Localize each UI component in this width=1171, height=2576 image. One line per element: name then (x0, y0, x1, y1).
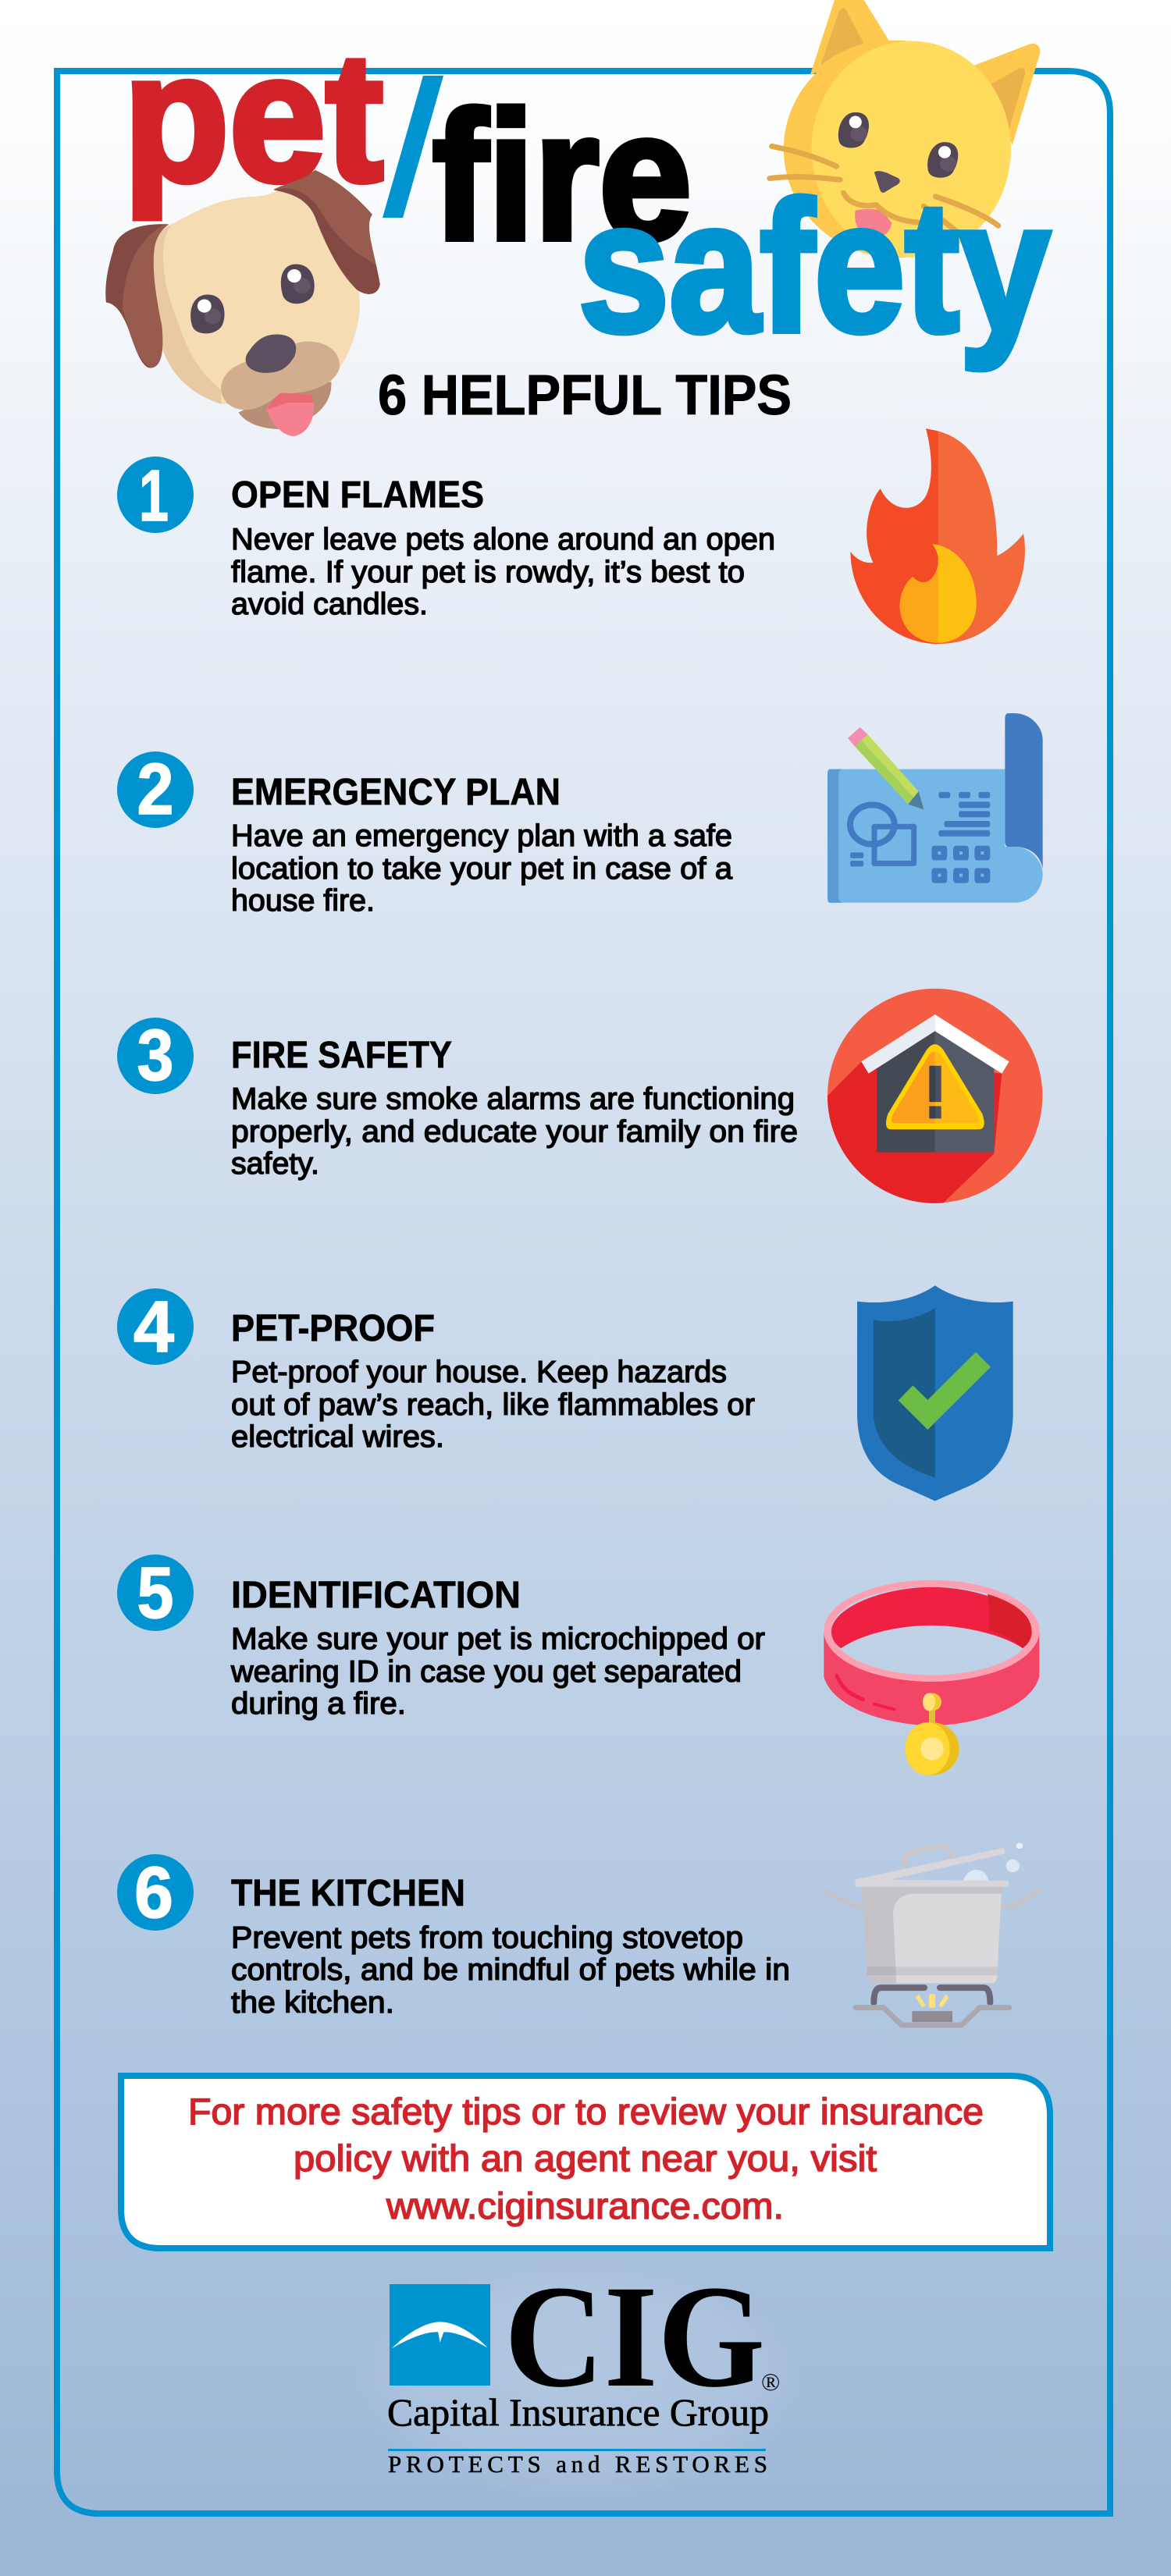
text: tip 3 body (231, 1082, 798, 1181)
text: tip 2 body (231, 819, 732, 918)
icon: cat (770, 0, 1040, 258)
tip 2 (117, 748, 732, 918)
heading: fire safety: FIRE SAFETY (231, 1035, 452, 1076)
title: fire safety (432, 73, 1050, 371)
icon: house fire alarm (828, 989, 1042, 1203)
logo: CIG Capital Insurance Group: ® (761, 2368, 780, 2396)
tip 6 (117, 1852, 790, 2020)
text: tip 2 body: Have an emergency plan with a safe (231, 819, 732, 853)
tip 5 (117, 1552, 765, 1721)
text: tip 4 body: out of paw’s reach, like flammables or (231, 1388, 755, 1422)
text: tip 5 body (230, 1622, 765, 1721)
heading: emergency plan: EMERGENCY PLAN (231, 772, 561, 813)
title: fire safety: safety (578, 164, 1050, 371)
icon: pet collar (824, 1580, 1039, 1775)
text: tip 2 body: location to take your pet in case of a (231, 852, 732, 886)
number badge 5 (117, 1552, 194, 1633)
callout: more safety tips (121, 2076, 1050, 2248)
number badge 4 (117, 1286, 194, 1367)
number badge 3: 3 (137, 1014, 173, 1096)
text: tip 1 body: Never leave pets alone around an open (231, 523, 775, 556)
text: tip 1 body: flame. If your pet is rowdy, it’s best to (231, 556, 745, 589)
heading: identification: IDENTIFICATION (231, 1575, 521, 1616)
text: tip 3 body: safety. (231, 1147, 319, 1181)
text: tip 5 body: Make sure your pet is microchipped or (231, 1622, 765, 1656)
number badge 6: 6 (134, 1852, 173, 1933)
text: tip 5 body: during a fire. (231, 1687, 406, 1721)
tip 4 (117, 1286, 755, 1454)
text: tip 3 body: properly, and educate your family on fire (231, 1115, 798, 1149)
title: pet and slash: pet (123, 15, 383, 219)
icon: dog (105, 170, 380, 436)
icon: shield with check (857, 1285, 1013, 1501)
icon: flame (850, 428, 1025, 644)
logo: CIG Capital Insurance Group: CIG (504, 2254, 765, 2418)
text: tip 4 body: electrical wires. (231, 1420, 444, 1454)
text: tip 5 body: wearing ID in case you get separated (230, 1655, 742, 1689)
logo: CIG Capital Insurance Group (353, 2254, 806, 2497)
number badge 4: 4 (133, 1286, 174, 1367)
callout: more safety tips: policy with an agent near you, visit (294, 2137, 877, 2179)
text: tip 6 body: Prevent pets from touching stovetop (231, 1921, 743, 1955)
logo: CIG Capital Insurance Group: PROTECTS and RESTORES (388, 2450, 767, 2478)
tip 1 (117, 455, 775, 621)
text: tip 6 body: the kitchen. (231, 1986, 394, 2020)
number badge 5: 5 (137, 1552, 173, 1633)
text: tip 6 body (231, 1921, 790, 2020)
title: fire safety: fire (432, 73, 692, 278)
text: tip 2 body: house fire. (231, 884, 375, 918)
number badge 2: 2 (137, 748, 173, 830)
number badge 1 (117, 455, 194, 536)
heading: 6 helpful tips: 6 HELPFUL TIPS (378, 364, 792, 427)
number badge 3 (117, 1014, 194, 1096)
text: tip 1 body: avoid candles. (231, 588, 428, 621)
number badge 2 (117, 748, 194, 830)
text: tip 4 body: Pet-proof your house. Keep hazards (231, 1356, 727, 1389)
heading: the kitchen: THE KITCHEN (231, 1873, 465, 1914)
heading: pet-proof: PET-PROOF (231, 1308, 435, 1349)
icon: floor plan with pencil (828, 713, 1043, 903)
number badge 6 (117, 1852, 194, 1933)
text: tip 6 body: controls, and be mindful of pets while in (231, 1953, 790, 1987)
callout: more safety tips: For more safety tips or to review your insurance (188, 2091, 984, 2132)
callout: more safety tips: www.ciginsurance.com. (386, 2185, 784, 2226)
number badge 1: 1 (139, 455, 169, 536)
text: tip 4 body (231, 1356, 755, 1454)
text: tip 3 body: Make sure smoke alarms are functioning (231, 1082, 795, 1116)
heading: open flames: OPEN FLAMES (231, 474, 484, 516)
text: tip 1 body (231, 523, 775, 621)
icon: pot on stove (825, 1843, 1038, 2025)
logo: CIG Capital Insurance Group: Capital Insurance Group (387, 2390, 769, 2434)
tip 3 (117, 1014, 798, 1181)
